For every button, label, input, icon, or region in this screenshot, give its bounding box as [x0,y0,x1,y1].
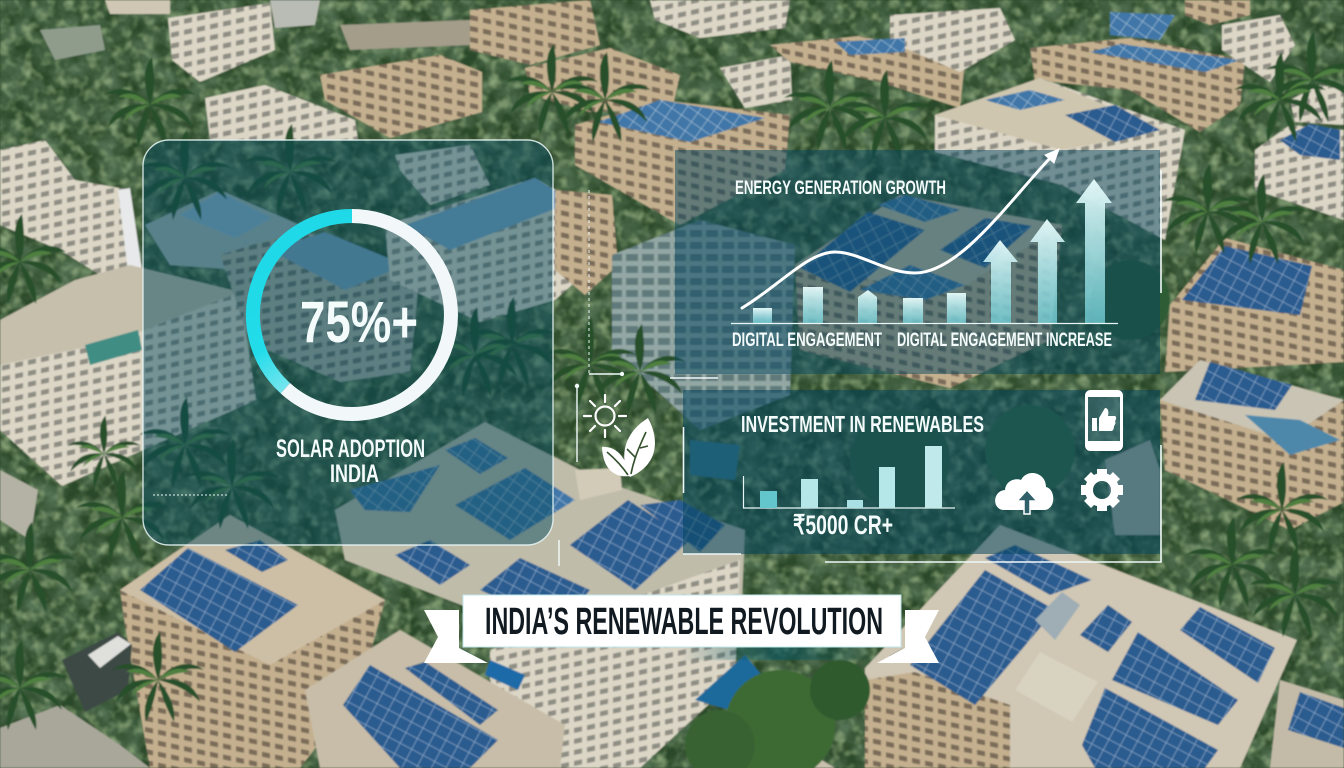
trend line arrow [742,149,1059,308]
icon: leaves [602,418,655,477]
left buildings [0,140,618,540]
title: INDIA’S RENEWABLE REVOLUTION [485,601,883,643]
right buildings [1160,238,1344,530]
title banner [424,595,939,663]
ribbon tail: left [424,610,488,663]
panel: solar adoption [143,140,553,545]
ribbon tail: right [877,610,939,663]
corner frame lines [670,170,1161,562]
bar and arrow chart [731,179,1118,324]
panel: investment in renewables [683,390,1160,554]
dotted accent line [153,494,228,496]
axis label: digital engagement: DIGITAL ENGAGEMENT [732,329,882,351]
top row buildings [40,0,1295,140]
bar chart: investment [744,446,955,508]
stat: 75%+: 75%+ [300,290,418,355]
icon: sun [584,395,626,437]
upper middle buildings [575,78,1344,240]
donut chart: 75% plus [253,216,451,414]
lower foreground buildings [0,422,1344,768]
heading: energy generation growth: ENERGY GENERATION GROWTH [735,177,946,199]
label: solar adoption india: INDIA [330,460,379,488]
axis label: digital engagement increase: DIGITAL ENGAGEMENT INCREASE [897,329,1112,351]
central rooftop buildings [612,195,1160,535]
banner plate [463,595,901,647]
label: solar adoption india [276,435,425,488]
connector lines [559,190,624,566]
stat: 5000 crore: ₹5000 CR+ [793,510,893,540]
icon: gear [1081,469,1123,511]
label: solar adoption india: SOLAR ADOPTION [276,435,425,463]
heading: investment in renewables: INVESTMENT IN RENEWABLES [741,411,984,437]
panel: energy generation growth [675,149,1160,374]
icon: phone with thumbs up [1086,391,1122,450]
icon: cloud upload [995,473,1053,514]
